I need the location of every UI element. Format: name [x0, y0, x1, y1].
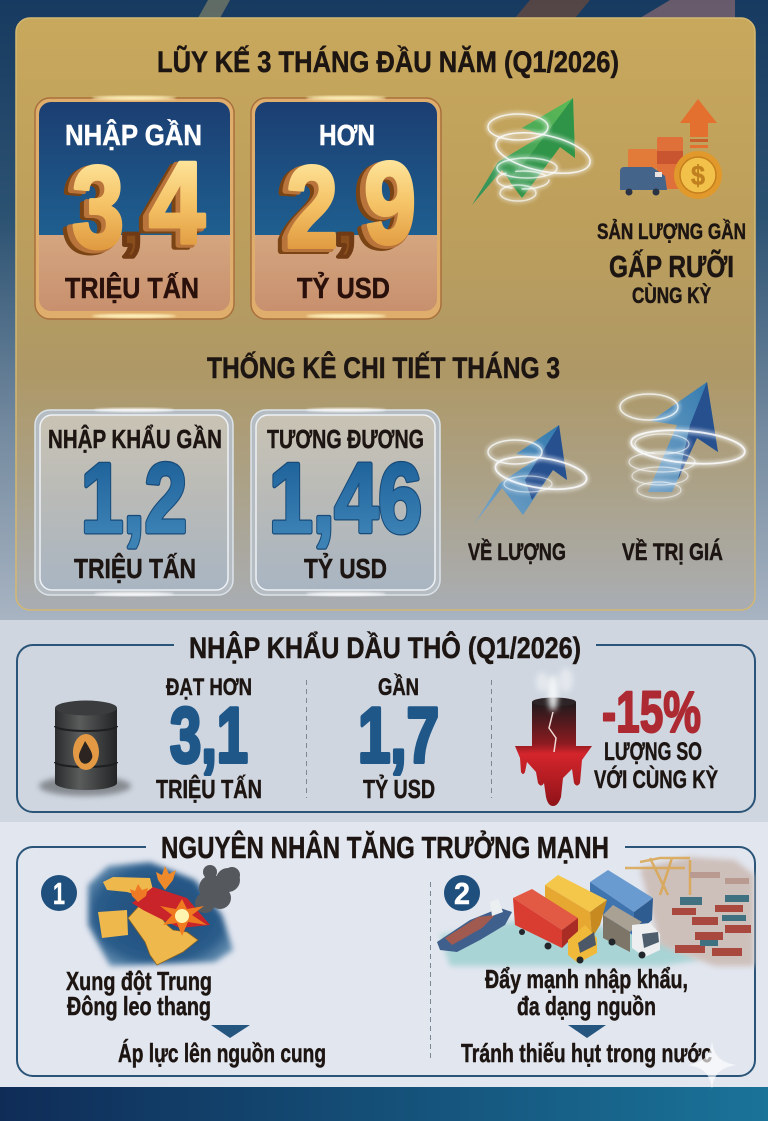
label: by value: VỀ TRỊ GIÁ — [622, 538, 723, 566]
stat: 3.1 million tons: ĐẠT HƠN — [166, 674, 252, 701]
text: Middle East conflict escalates: Xung đột Trung — [66, 966, 212, 996]
arrow: cause to effect 2 — [568, 1025, 606, 1038]
card: import volume 3.4 million tons: NHẬP GẦN — [65, 118, 202, 152]
icon: green rising arrow with swirl — [472, 98, 594, 205]
arrow: cause to effect 1 — [211, 1025, 250, 1038]
text: output nearly 1.5x year on year — [597, 219, 746, 308]
stat: minus 15 percent year on year: LƯỢNG SO — [604, 738, 702, 766]
text: Middle East conflict escalates — [66, 966, 212, 1021]
icon: sparkle watermark — [688, 1041, 736, 1089]
text: output nearly 1.5x year on year: CÙNG KỲ — [632, 283, 711, 308]
card: import volume 3.4 million tons: 4 — [144, 140, 202, 270]
card: import volume 3.4 million tons: 4 — [149, 138, 205, 268]
heading: crude oil imports: NHẬP KHẨU DẦU THÔ (Q1/2026) — [189, 631, 581, 665]
stat: 3.1 million tons — [156, 674, 262, 804]
card: import value 2.9 billion USD: 2 — [281, 144, 335, 274]
card: March value 1.46 billion USD: 1,46 — [269, 443, 422, 553]
card: import volume 3.4 million tons — [35, 96, 234, 319]
card: import value 2.9 billion USD: HƠN — [319, 120, 375, 152]
heading: causes of strong growth: NGUYÊN NHÂN TĂNG TRƯỞNG MẠNH — [161, 829, 609, 865]
label: by volume: VỀ LƯỢNG — [468, 538, 566, 566]
text: boost imports, diversify sources: đa dạng nguồn — [517, 991, 656, 1021]
card: import value 2.9 billion USD: 2 — [277, 146, 331, 276]
stat: minus 15 percent year on year — [594, 680, 718, 794]
card: March value 1.46 billion USD — [251, 408, 440, 596]
card: March volume 1.2 million tons: NHẬP KHẨU GẦN — [48, 424, 222, 454]
text: Middle East conflict escalates: Đông leo thang — [67, 991, 211, 1021]
card: March value 1.46 billion USD: TƯƠNG ĐƯƠNG — [267, 424, 424, 454]
text: boost imports, diversify sources: Đẩy mạnh nhập khẩu, — [485, 964, 688, 994]
card: March volume 1.2 million tons: 1,2 — [81, 443, 187, 553]
illustration: Middle East conflict map — [88, 862, 240, 966]
stat: 1.7 billion USD: TỶ USD — [363, 774, 435, 804]
stat: 1.7 billion USD: 1,7 — [358, 691, 439, 779]
stat: 1.7 billion USD: GẦN — [378, 673, 419, 701]
icon: blue arrow, volume — [475, 425, 589, 523]
card: import volume 3.4 million tons: 4 — [140, 142, 198, 272]
card: import value 2.9 billion USD: 9 — [355, 142, 411, 272]
heading: March detail: THỐNG KÊ CHI TIẾT THÁNG 3 — [207, 351, 560, 385]
icon: blue arrow, value — [620, 382, 746, 498]
card: import volume 3.4 million tons: TRIỆU TẤN — [65, 271, 199, 305]
card: import value 2.9 billion USD — [251, 96, 441, 319]
icon: oil barrel — [39, 700, 131, 796]
card: import value 2.9 billion USD: 9 — [364, 138, 416, 268]
card: import volume 3.4 million tons: , — [118, 177, 144, 262]
panel: Q1 totals and March statistics — [16, 18, 755, 610]
card: import volume 3.4 million tons: 3 — [63, 146, 117, 276]
card: import value 2.9 billion USD: 2 — [286, 142, 338, 272]
icon: truck, boxes and coin with up arrow: $ — [691, 160, 705, 191]
card: March volume 1.2 million tons: 1,2 — [81, 443, 187, 553]
stat: minus 15 percent year on year: -15% — [602, 680, 701, 745]
card: import value 2.9 billion USD: 9 — [359, 140, 415, 270]
illustration: port, ship, containers and trucks — [437, 857, 754, 966]
number badge 2 — [444, 875, 480, 911]
card: import value 2.9 billion USD: , — [332, 177, 358, 262]
card: import volume 3.4 million tons: 3 — [72, 142, 124, 272]
text: boost imports, diversify sources — [485, 964, 688, 1021]
stat: 3.1 million tons: 3,1 — [170, 691, 248, 779]
card: March volume 1.2 million tons: TRIỆU TẤN — [74, 553, 196, 584]
number badge 1: 1 — [53, 876, 65, 911]
text: output nearly 1.5x year on year: GẤP RƯỠI — [609, 248, 734, 284]
card: March value 1.46 billion USD: TỶ USD — [304, 552, 387, 584]
text: supply pressure: Áp lực lên nguồn cung — [118, 1038, 326, 1068]
card: March value 1.46 billion USD: 1,46 — [269, 443, 422, 553]
stat: 3.1 million tons: TRIỆU TẤN — [156, 774, 262, 804]
icon: melting red down arrow with smoke — [515, 668, 592, 806]
stat: minus 15 percent year on year: VỚI CÙNG KỲ — [594, 764, 718, 794]
card: import volume 3.4 million tons: 3 — [67, 144, 121, 274]
card: March volume 1.2 million tons — [35, 408, 233, 596]
number badge 1 — [41, 875, 77, 911]
icon: truck, boxes and coin with up arrow — [620, 99, 722, 199]
heading: Q1 cumulative: LŨY KẾ 3 THÁNG ĐẦU NĂM (Q1/2026) — [157, 45, 619, 79]
panel: causes of strong growth — [17, 829, 755, 1089]
card: import value 2.9 billion USD: TỶ USD — [297, 271, 390, 305]
number badge 2: 2 — [454, 876, 470, 911]
panel: crude oil imports — [17, 631, 755, 812]
stat: 1.7 billion USD — [358, 673, 439, 804]
